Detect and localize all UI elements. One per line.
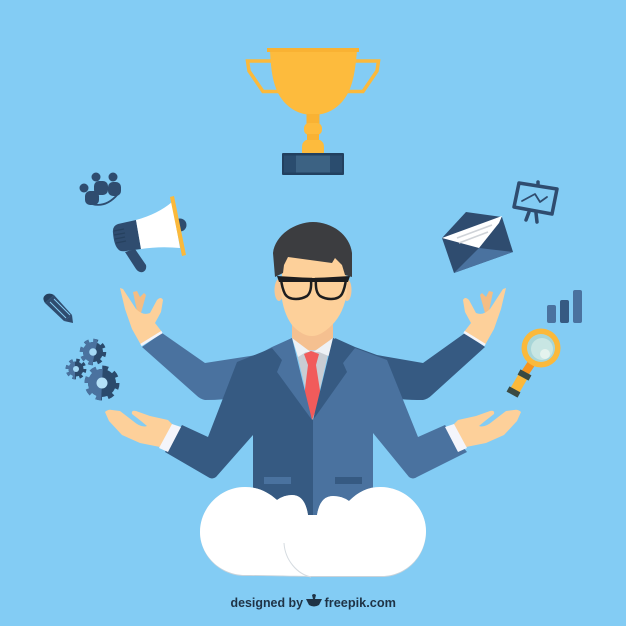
icon: bar chart [547, 290, 582, 323]
necktie [304, 351, 321, 420]
neck [292, 320, 333, 354]
jacket right side [313, 348, 467, 515]
upper left arm [142, 333, 292, 400]
upper right hand [463, 288, 506, 345]
face [281, 255, 347, 336]
gear top [82, 341, 104, 363]
icon: gears [68, 341, 117, 398]
upper left hand [120, 288, 163, 345]
gear left [68, 360, 84, 378]
upper right arm [335, 333, 485, 400]
jacket [165, 338, 467, 515]
pocket left [264, 477, 291, 484]
lapel left [272, 338, 312, 420]
icon: presentation board [514, 182, 557, 222]
icon: team [80, 172, 121, 205]
cloud [200, 487, 426, 577]
lower left hand [105, 410, 181, 452]
collar [292, 338, 333, 357]
icon: freepik logo [306, 594, 322, 606]
head [273, 222, 352, 336]
glasses [277, 276, 350, 299]
jacket left side [165, 348, 313, 515]
ears [274, 279, 284, 301]
trophy [248, 48, 378, 175]
icon: megaphone [113, 196, 186, 272]
icon: magnifying glass [508, 328, 560, 395]
lower right hand [445, 410, 521, 452]
lapel right [313, 338, 354, 420]
icon: pencil [43, 294, 73, 323]
icon: envelope [442, 212, 513, 273]
shirt [296, 350, 329, 420]
hair [273, 222, 352, 277]
footer credit: designed by [230, 595, 304, 610]
gear bottom [87, 368, 117, 398]
footer credit: freepik.com [324, 595, 396, 610]
pocket right [335, 477, 362, 484]
footer credit [230, 594, 396, 610]
